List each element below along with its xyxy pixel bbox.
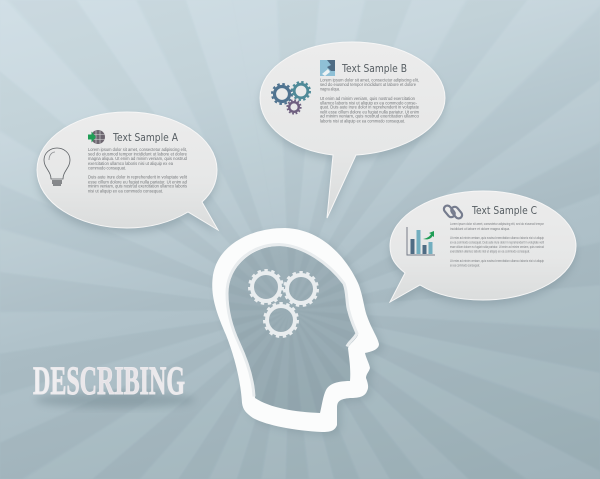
inner bevel of head xyxy=(227,244,357,396)
icon: gears xyxy=(272,82,310,114)
body text C: incididunt ut labore et dolore magna aliqua. xyxy=(450,227,510,231)
icon: globe with arrow xyxy=(88,130,105,144)
body text C: Lorem ipsum dolor sit amet, consectetur adipiscing elit, sed do eiusmod tempor xyxy=(450,222,545,226)
body text B xyxy=(320,78,420,124)
body text A: nisi ut aliquip ex ea commodo consequat. xyxy=(88,188,163,194)
icon: bar chart with arrow xyxy=(407,227,435,255)
body text A: Duis aute irure dolor in reprehenderit in voluptate velit xyxy=(88,174,188,180)
body text C: Ut enim ad minim veniam, quis nostrud exercitation ullamco laboris nisi ut aliquip xyxy=(450,259,544,263)
heading: text sample A: Text Sample A xyxy=(112,132,179,144)
icon: light bulb xyxy=(44,148,70,185)
body text B: Ut enim ad minim veniam, quis nostrud exercitation xyxy=(320,96,416,101)
body text B: quat. Duis aute irure dolor in reprehenderit in voluptate xyxy=(320,104,420,110)
title: describing: DESCRIBING xyxy=(33,358,185,403)
heading: text sample C: Text Sample C xyxy=(471,205,537,217)
body text C: exercitation ullamco laboris nisi ut aliquip ex ea commodo consequat. xyxy=(450,250,530,254)
body text B: laboris nisi ut aliquip ex ea commodo consequat. xyxy=(320,118,405,124)
gear left xyxy=(250,270,282,304)
speech bubble B xyxy=(260,42,445,222)
heading: text sample B: Text Sample B xyxy=(341,63,407,75)
body text B: ad minim veniam, quis nostrud exercitation ullamco xyxy=(320,114,420,118)
speech bubble A xyxy=(37,112,218,234)
icon: puzzle arrows xyxy=(320,60,335,76)
body text C: ex ea commodo consequat. xyxy=(450,264,480,268)
body text B: velit esse cillum dolore eu fugiat nulla pariatur. Ut enim xyxy=(320,110,419,114)
body text A: magna aliqua. Ut enim ad minim veniam, quis nostrud xyxy=(88,156,188,161)
body text B: ullamco laboris nisi ut aliquip ex ea commodo conse- xyxy=(320,100,418,106)
body text A: esse cillum dolore eu fugiat nulla pariatur. Ut enim ad xyxy=(88,180,188,184)
body text A xyxy=(88,147,188,194)
body text C: ex ea commodo consequat. Duis aute irure dolor in reprehenderit in voluptate velit xyxy=(450,240,544,244)
body text B: sed do eiusmod tempor incididunt ut labore et dolore xyxy=(320,82,417,87)
body text C: esse cillum dolore eu fugiat nulla pariatur. Ut enim ad minim veniam, quis nostrud xyxy=(450,245,544,249)
body text B: Lorem ipsum dolor sit amet, consectetur adipiscing elit, xyxy=(320,78,419,82)
body text B: magna aliqua. xyxy=(320,86,340,92)
body text A: minim veniam, quis nostrud exercitation ullamco laboris xyxy=(88,184,187,188)
gear bottom xyxy=(264,304,298,336)
body text C: Ut enim ad minim veniam, quis nostrud exercitation ullamco laboris nisi ut aliquip xyxy=(450,236,544,240)
speech bubble C xyxy=(390,191,576,306)
body text A: Lorem ipsum dolor sit amet, consectetur adipiscing elit, xyxy=(88,147,187,152)
body text C xyxy=(450,222,545,268)
body text A: exercitation ullamco laboris nisi ut aliquip ex ea xyxy=(88,161,174,166)
title: describing xyxy=(33,358,195,408)
icon: chain link xyxy=(442,204,464,220)
body text A: commodo consequat. xyxy=(88,166,126,170)
head outline with gears xyxy=(212,228,383,435)
gear right xyxy=(284,272,318,306)
body text A: sed do eiusmod tempor incididunt ut labore et dolore xyxy=(88,152,188,156)
